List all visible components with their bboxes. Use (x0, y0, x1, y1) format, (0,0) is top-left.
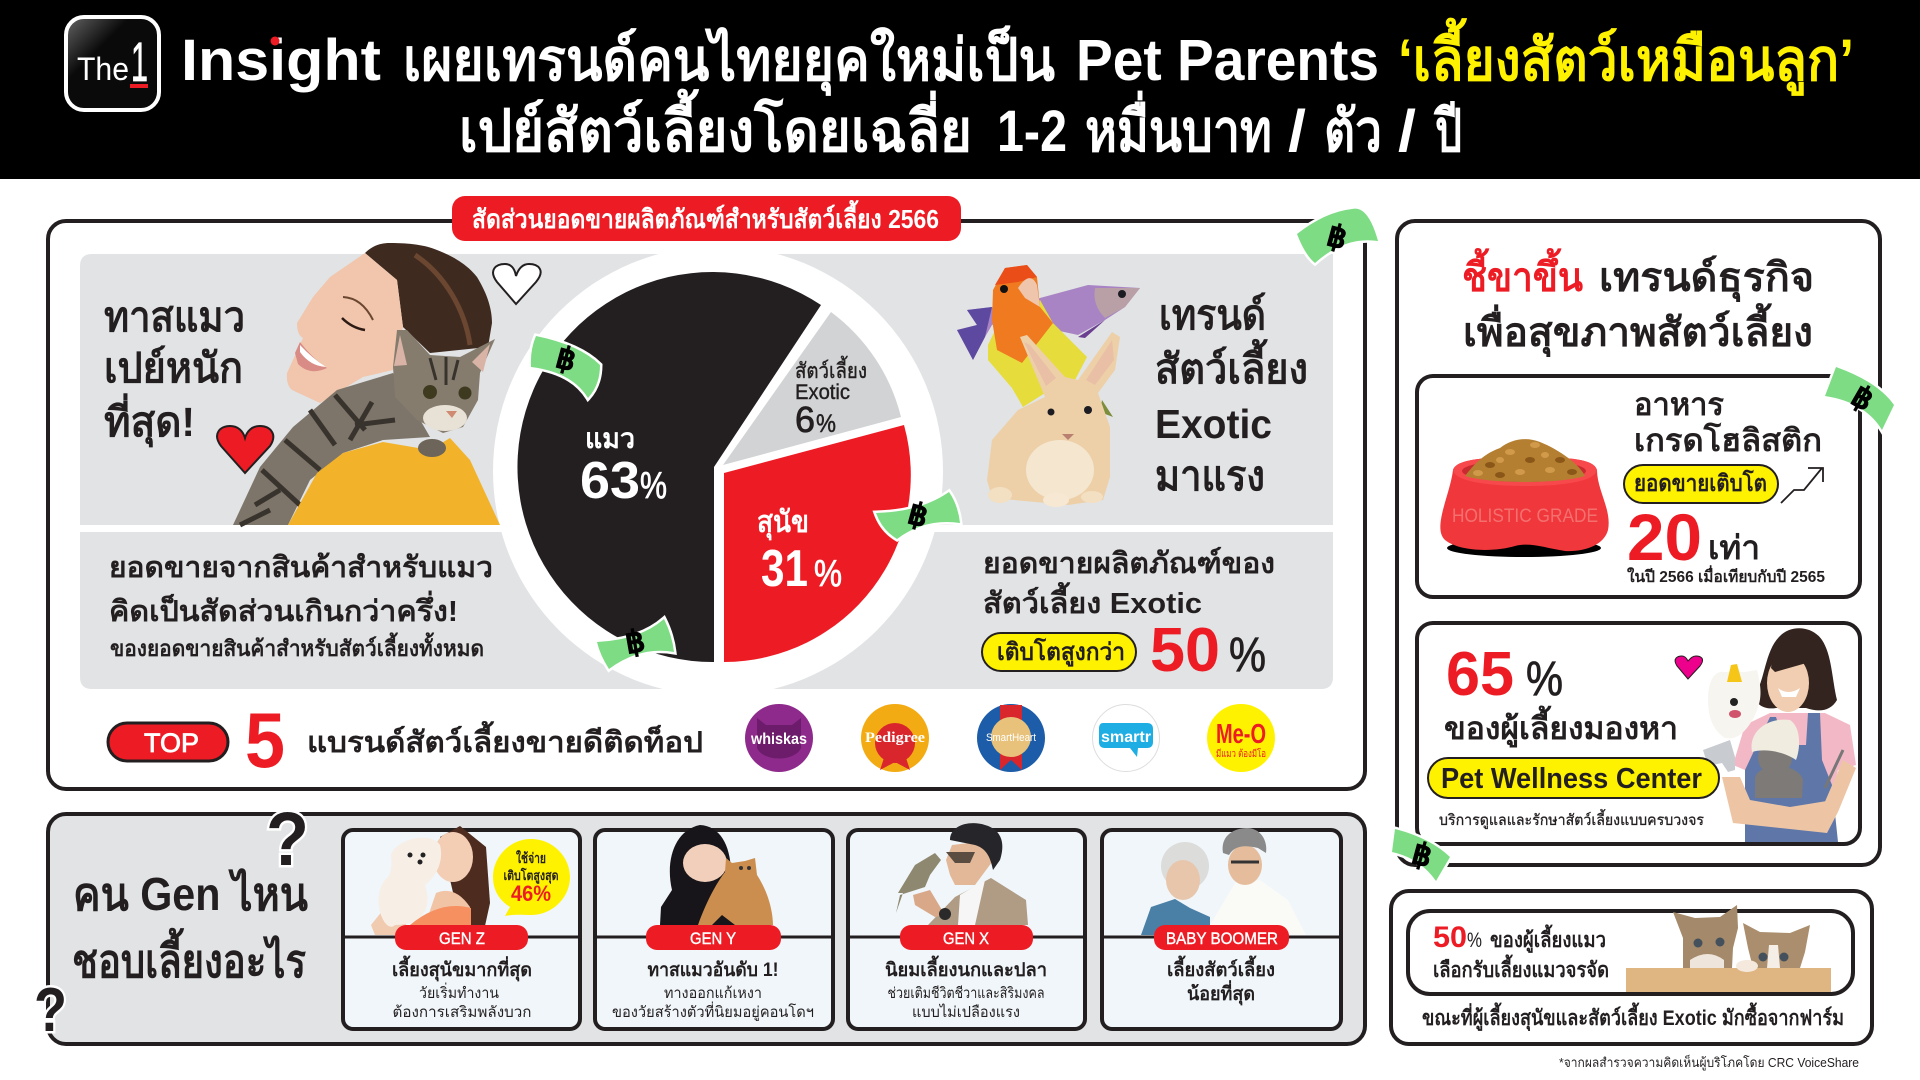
white circle behind pie (493, 246, 943, 696)
logo: pedigree (861, 704, 929, 772)
card text: วัยเริ่มทำงาน (419, 982, 499, 1002)
text: exotic growth: % (1229, 629, 1266, 682)
icon: baht note right card (1825, 367, 1894, 430)
card text (392, 955, 532, 1021)
text: exotic trend: สัตว์เลี้ยง (1155, 339, 1308, 392)
icon: baht note pie bottom: ฿ (623, 625, 647, 660)
text: holistic food: เกรดโฮลิสติก (1634, 422, 1822, 458)
icon: baht note top right (1297, 209, 1378, 263)
photo: woman with dog and cat (1703, 628, 1856, 842)
gen label: GEN Z (439, 929, 485, 948)
card: Gen Y (595, 825, 833, 1029)
icon: red bowl (1440, 439, 1609, 557)
photo: man with parrot (896, 823, 1028, 925)
text: exotic trend (1155, 292, 1308, 499)
illustration: two kittens in box (1626, 905, 1831, 992)
badge: top (108, 723, 228, 761)
text: 65 percent: % (1526, 653, 1563, 706)
panel: pet health business trends (1397, 221, 1880, 865)
card text (885, 955, 1047, 1021)
card text (1167, 955, 1275, 1006)
title: เปย์สัตว์เลี้ยงโดยเฉลี่ย (459, 89, 972, 164)
text: cat parents: ที่สุด! (104, 393, 195, 448)
text: holistic food: ในปี 2566 เมื่อเทียบกับปี 2565 (1627, 565, 1825, 586)
logo: smartr (1092, 704, 1160, 772)
panel: which generation keeps what (34, 797, 1365, 1045)
header band (0, 0, 1920, 179)
card text: เลี้ยงสุนัขมากที่สุด (392, 955, 532, 982)
photo: woman with white dog (371, 826, 490, 935)
panel: stray cat adoption (1391, 891, 1872, 1044)
icon: baht note top right: ฿ (1323, 219, 1350, 256)
text: exotic trend: Exotic (1155, 401, 1272, 447)
callout: spending growth 46%: ใช้จ่าย (516, 849, 546, 866)
heading: ชี้ขาขึ้น (1462, 248, 1583, 300)
card: Gen Z (343, 826, 580, 1029)
card text: ทางออกแก้เหงา (664, 985, 762, 1002)
icon: baht note panel corner: ฿ (1408, 837, 1435, 874)
title: Insight (181, 28, 381, 93)
label: cat: % (640, 465, 667, 507)
text: cat sales (109, 552, 493, 661)
text: cat parents: เปย์หนัก (104, 345, 243, 391)
card text: เลี้ยงสัตว์เลี้ยง (1167, 955, 1275, 981)
grey backdrop top (80, 254, 1333, 525)
text: holistic food: 20 (1627, 500, 1702, 574)
text: 50 percent (1433, 921, 1609, 982)
gen label: GEN Y (690, 929, 736, 948)
label: dog: สุนัข (757, 506, 809, 541)
logo: me-o: มีแมว ต้องมีโอ (1216, 747, 1266, 760)
callout: spending growth 46%: 46% (511, 881, 551, 906)
text: 50 percent: ของผู้เลี้ยงแมว (1490, 924, 1606, 954)
footnote: *จากผลสำรวจความคิดเห็นผู้บริโภคโดย CRC VoiceShare (1559, 1053, 1859, 1071)
top 5 brands row (108, 696, 1275, 784)
label: exotic: % (816, 410, 836, 438)
label: dog (757, 506, 842, 598)
text: 65 percent: ของผู้เลี้ยงมองหา (1444, 705, 1678, 748)
icon: baht note panel corner (1392, 829, 1450, 881)
callout: spending growth 46% (493, 839, 570, 916)
logo: smartheart (977, 704, 1045, 772)
logo: whiskas (745, 704, 813, 772)
heading (1462, 248, 1814, 358)
illustration: fish, bird and rabbit (957, 265, 1140, 507)
icon: pink heart (1675, 656, 1703, 679)
title (181, 18, 1854, 164)
pie chart (517, 272, 911, 662)
title: ปี (1433, 99, 1462, 164)
text: exotic growth: ยอดขายผลิตภัณฑ์ของ (983, 546, 1275, 580)
icon: question mark small: ? (34, 976, 67, 1045)
card text: ต้องการเสริมพลังบวก (392, 1004, 532, 1021)
card: holistic food (1417, 376, 1860, 597)
text: holistic food: เท่า (1708, 529, 1760, 566)
gen label: GEN X (943, 929, 989, 948)
label: dog: 31 (761, 540, 808, 598)
icon: red heart (217, 426, 273, 473)
icon: baht note pie bottom (597, 619, 674, 669)
photo: woman with orange cat (660, 825, 773, 925)
callout: spending growth 46%: เติบโตสูงสุด (504, 867, 558, 884)
title: / (1398, 99, 1416, 164)
text: 65 percent: บริการดูแลและรักษาสัตว์เลี้ยงแบบครบวงจร (1439, 809, 1704, 829)
heading (72, 868, 308, 987)
title: เผยเทรนด์คนไทยยุคใหม่เป็น (403, 25, 1055, 97)
inner callout (1408, 905, 1853, 994)
gen label (646, 925, 781, 950)
label: dog: % (814, 553, 842, 595)
text: 50 percent: % (1467, 929, 1482, 952)
icon: red bowl: HOLISTIC GRADE (1452, 506, 1598, 527)
logo: smartr: smartr (1101, 729, 1151, 746)
text: 50 percent: 50 (1433, 921, 1467, 954)
photo: senior couple (1141, 828, 1306, 935)
text: exotic trend: มาแรง (1155, 453, 1265, 499)
logo: The1 (66, 17, 159, 110)
title: / (1288, 99, 1306, 164)
card text: น้อยที่สุด (1187, 980, 1255, 1006)
logo: pedigree: Pedigree (865, 730, 925, 746)
text: exotic growth: 50 (1150, 616, 1220, 685)
text: holistic food: ยอดขายเติบโต (1634, 469, 1767, 496)
label: cat: แมว (585, 423, 635, 454)
text: exotic growth: สัตว์เลี้ยง Exotic (983, 581, 1202, 620)
text: 65 percent (1428, 640, 1719, 829)
card text: แบบไม่เปลืองแรง (912, 1003, 1020, 1021)
text: exotic growth (982, 546, 1275, 685)
logo: me-o: Me-O (1216, 718, 1266, 749)
text: 65 percent: 65 (1446, 640, 1514, 709)
label: exotic: Exotic (795, 381, 850, 404)
card text: ทาสแมวอันดับ 1! (648, 960, 778, 981)
text: cat sales: ยอดขายจากสินค้าสำหรับแมว (109, 552, 493, 584)
logo: The1: 1 (131, 30, 148, 93)
gen label (900, 925, 1033, 950)
text: holistic food: อาหาร (1634, 387, 1724, 422)
gen label: BABY BOOMER (1166, 929, 1278, 948)
gen label (395, 925, 528, 950)
logo: The1: The (77, 51, 129, 87)
heading: เทรนด์ธุรกิจ (1599, 255, 1814, 303)
title: หมื่นบาท (1085, 90, 1272, 164)
icon: baht note pie left: ฿ (552, 341, 579, 378)
card text (612, 960, 814, 1021)
heading: ชอบเลี้ยงอะไร (72, 927, 306, 987)
logo: me-o (1207, 704, 1275, 772)
icon: white heart (493, 264, 541, 304)
text: 50 percent: เลือกรับเลี้ยงแมวจรจัด (1433, 954, 1609, 982)
label: exotic: 6 (795, 399, 815, 440)
label: exotic: สัตว์เลี้ยง (795, 356, 867, 383)
card: Baby Boomer (1102, 828, 1341, 1029)
icon: question mark large: ? (266, 797, 309, 882)
icon: baht note pie right (876, 492, 960, 539)
text: cat parents: ทาสแมว (104, 294, 245, 340)
slice: exotic 6% (723, 312, 901, 465)
card text: ของวัยสร้างตัวที่นิยมอยู่คอนโดฯ (612, 1001, 814, 1021)
heading pill (452, 196, 961, 241)
arrow: growth (1781, 468, 1823, 503)
badge: top: TOP (144, 728, 199, 758)
text: exotic trend: เทรนด์ (1159, 292, 1266, 338)
text: dogs and exotics from farms: ขณะที่ผู้เลี้ยงสุนัขและสัตว์เลี้ยง Exotic มักซื้อจากฟาร์ม (1422, 1002, 1844, 1032)
illustration: woman hugging cat (233, 243, 500, 525)
top 5 brands row: แบรนด์สัตว์เลี้ยงขายดีติดท็อป (307, 720, 703, 759)
text: exotic growth: เติบโตสูงกว่า (997, 637, 1125, 667)
title: ‘เลี้ยงสัตว์เหมือนลูก’ (1398, 18, 1854, 96)
heading: เพื่อสุขภาพสัตว์เลี้ยง (1463, 303, 1813, 358)
top 5 brands row: 5 (245, 696, 285, 784)
label: cat (580, 423, 667, 510)
slice: dog 31% (724, 425, 911, 662)
label: exotic (795, 356, 867, 440)
title: 1-2 (997, 99, 1067, 164)
label: cat: 63 (580, 452, 640, 510)
text: cat sales: ของยอดขายสินค้าสำหรับสัตว์เลี้ยงทั้งหมด (110, 632, 484, 661)
card: Gen X (848, 823, 1085, 1029)
text: 65 percent: Pet Wellness Center (1441, 763, 1702, 795)
grey backdrop bottom (80, 532, 1333, 689)
card: pet wellness center (1417, 623, 1860, 844)
slice: cat 63% (517, 272, 821, 662)
gen label (1154, 925, 1289, 950)
heading: คน Gen ไหน (73, 868, 308, 920)
text: holistic food (1624, 387, 1825, 586)
text: cat sales: คิดเป็นสัดส่วนเกินกว่าครึ่ง! (109, 590, 458, 628)
icon: baht note pie right: ฿ (904, 497, 931, 534)
title: ตัว (1324, 99, 1382, 164)
text: cat parents (104, 294, 245, 448)
card text: ช่วยเติมชีวิตชีวาและสิริมงคล (888, 985, 1044, 1002)
card text: นิยมเลี้ยงนกและปลา (885, 955, 1047, 981)
panel: pet product sales share (48, 196, 1365, 789)
icon: baht note right card: ฿ (1846, 380, 1879, 418)
heading pill: สัดส่วนยอดขายผลิตภัณฑ์สำหรับสัตว์เลี้ยง 2566 (472, 199, 939, 234)
logo: whiskas: whiskas (750, 731, 807, 748)
title: Pet Parents (1076, 28, 1379, 93)
logo: smartheart: SmartHeart (986, 732, 1036, 744)
icon: baht note pie left (531, 336, 600, 398)
